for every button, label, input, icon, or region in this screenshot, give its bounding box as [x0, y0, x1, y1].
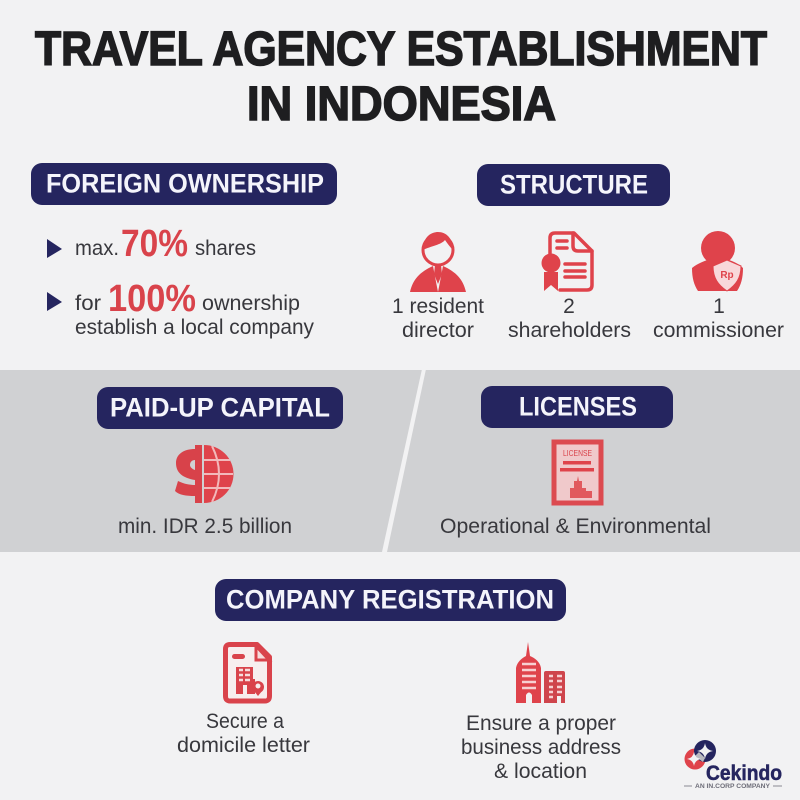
icon: commissioner	[692, 231, 743, 291]
bullet: max 70% shares: shares	[195, 237, 256, 260]
text: secure a domicile letter	[177, 710, 310, 757]
heading: paid-up capital	[97, 387, 343, 429]
bullet: 100% ownership: for	[75, 292, 101, 315]
heading: structure: STRUCTURE	[500, 170, 648, 200]
bullet: max 70% shares: max.	[75, 237, 119, 260]
text: ensure a proper address: business address	[461, 736, 621, 759]
text: secure a domicile letter: Secure a	[206, 710, 284, 733]
logo: Cekindo: AN IN.CORP COMPANY	[695, 784, 770, 790]
icon: office buildings	[516, 642, 565, 703]
icon: dollar globe	[175, 445, 234, 503]
heading: foreign ownership	[31, 163, 337, 205]
text: ensure a proper address	[461, 712, 621, 783]
logo: Cekindo: Cekindo	[706, 762, 782, 785]
bullet: 100% ownership: 100%	[108, 278, 196, 320]
text: ensure a proper address: & location	[494, 760, 587, 783]
panel: structure	[392, 164, 784, 342]
bullet: 100% ownership: establish a local company	[75, 316, 314, 339]
heading: paid-up capital: PAID-UP CAPITAL	[110, 392, 330, 422]
bullet: max 70% shares: 70%	[121, 223, 188, 265]
heading: structure	[477, 164, 670, 206]
icon: domicile letter	[226, 644, 270, 701]
text: operational and environmental: Operational & Environmental	[440, 515, 711, 538]
text: 2 shareholders: 2	[563, 295, 575, 318]
gray band behind capital and licenses	[0, 369, 800, 552]
icon: license document	[554, 442, 601, 503]
heading: licenses	[481, 386, 673, 428]
logo: Cekindo	[684, 740, 782, 790]
icon: commissioner: Rp	[720, 270, 734, 281]
heading: foreign ownership: FOREIGN OWNERSHIP	[46, 168, 324, 198]
text: 1 commissioner: commissioner	[653, 319, 784, 342]
text: 1 resident director: director	[402, 319, 474, 342]
icon: resident director	[410, 232, 466, 292]
heading: licenses: LICENSES	[519, 392, 637, 422]
text: 1 commissioner: 1	[713, 295, 725, 318]
text: 1 commissioner	[653, 295, 784, 342]
panel: foreign ownership	[31, 163, 337, 339]
icon: shareholders certificate	[542, 233, 592, 291]
heading: company registration: COMPANY REGISTRATION	[226, 584, 554, 614]
text: ensure a proper address: Ensure a proper	[466, 712, 616, 735]
icon: license document: LICENSE	[563, 448, 592, 458]
panel: company registration	[177, 579, 621, 783]
title	[35, 23, 767, 131]
panel: paid-up capital	[97, 387, 343, 538]
bullet: max 70% shares	[47, 223, 256, 265]
bullet: 100% ownership	[47, 278, 314, 339]
title: IN INDONESIA	[247, 78, 556, 131]
text: 2 shareholders	[508, 295, 631, 342]
text: 1 resident director	[392, 295, 484, 342]
text: min IDR 2.5 billion: min. IDR 2.5 billion	[118, 515, 292, 538]
text: secure a domicile letter: domicile letter	[177, 734, 310, 757]
text: 1 resident director: 1 resident	[392, 295, 484, 318]
heading: company registration	[215, 579, 566, 621]
text: 2 shareholders: shareholders	[508, 319, 631, 342]
bullet: 100% ownership: ownership	[202, 292, 300, 315]
panel: licenses	[440, 386, 711, 538]
